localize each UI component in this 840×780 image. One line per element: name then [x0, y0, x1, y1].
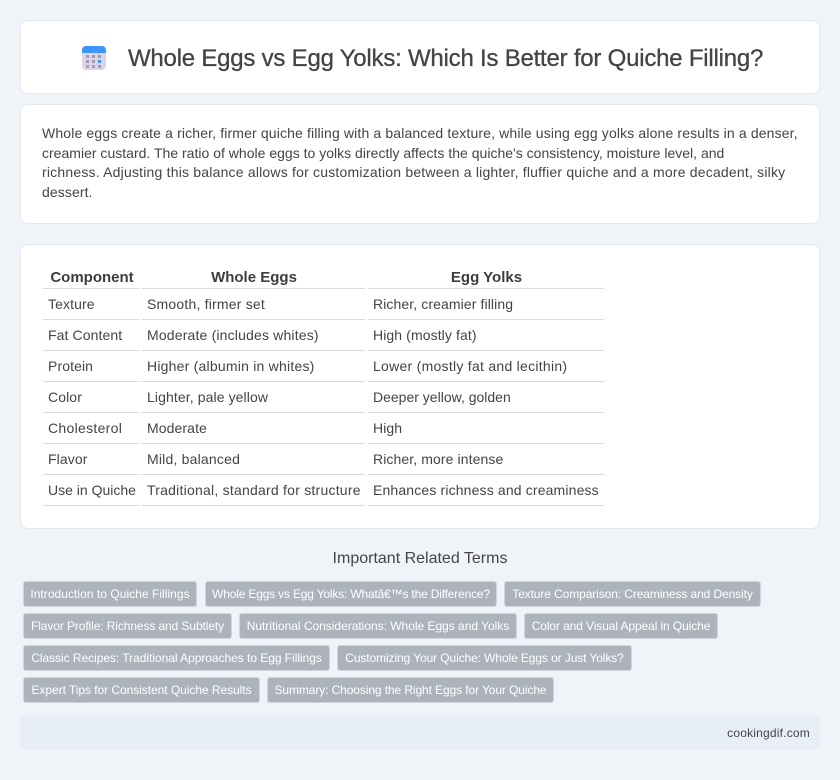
table rows: Texture [48, 296, 95, 312]
panel: introduction [20, 104, 820, 224]
table rows: Richer, creamier filling [373, 296, 513, 312]
panel: header [20, 20, 820, 94]
table rows: Richer, more intense [373, 451, 503, 467]
related term tags: Whole Eggs vs Egg Yolks: Whatâ€™s the Difference? [212, 587, 490, 601]
table rows: Smooth, firmer set [147, 296, 265, 312]
intro text [42, 125, 798, 200]
footer source: cookingdif.com [727, 726, 810, 740]
table header: Egg Yolks [451, 269, 522, 286]
intro text: richness. Adjusting this balance allows for customization between a lighter, fluffier quiche and a more decadent, silky [42, 164, 785, 180]
table rows: High [373, 420, 402, 436]
table rows: Color [48, 389, 82, 405]
table rows: Cholesterol [48, 420, 122, 436]
icon: calendar [82, 46, 106, 70]
table rows: High (mostly fat) [373, 327, 477, 343]
panel: comparison table [20, 244, 820, 529]
table rows [43, 288, 604, 506]
intro text: dessert. [42, 184, 93, 200]
table rows: Traditional, standard for structure [147, 482, 361, 498]
table rows: Deeper yellow, golden [373, 389, 511, 405]
related term tags: Nutritional Considerations: Whole Eggs and Yolks [247, 619, 509, 633]
table rows: Fat Content [48, 327, 122, 343]
table rows: Moderate (includes whites) [147, 327, 319, 343]
table rows: Lower (mostly fat and lecithin) [373, 358, 567, 374]
table rows: Flavor [48, 451, 88, 467]
related term tags: Color and Visual Appeal in Quiche [532, 619, 710, 633]
table header: Component [50, 269, 134, 286]
heading: related terms: Important Related Terms [333, 550, 507, 567]
intro text: Whole eggs create a richer, firmer quiche filling with a balanced texture, while using egg yolks alone results in a denser, [42, 125, 798, 141]
table rows: Mild, balanced [147, 451, 240, 467]
table rows: Protein [48, 358, 93, 374]
related term tags: Flavor Profile: Richness and Subtlety [31, 619, 224, 633]
related term tags: Expert Tips for Consistent Quiche Results [31, 683, 252, 697]
table rows: Moderate [147, 420, 207, 436]
table header: Whole Eggs [211, 269, 297, 286]
related term tags: Summary: Choosing the Right Eggs for Your Quiche [274, 683, 546, 697]
table rows: Higher (albumin in whites) [147, 358, 315, 374]
intro text: creamier custard. The ratio of whole eggs to yolks directly affects the quiche's consistency, moisture level, and [42, 145, 724, 161]
footer [20, 716, 820, 750]
related term tags [23, 581, 761, 703]
related term tags: Texture Comparison: Creaminess and Density [512, 587, 753, 601]
table rows: Enhances richness and creaminess [373, 482, 599, 498]
table header [50, 269, 522, 286]
title: Whole Eggs vs Egg Yolks: Which Is Better for Quiche Filling? [128, 45, 763, 72]
related term tags: Introduction to Quiche Fillings [30, 587, 190, 601]
table rows: Use in Quiche [48, 482, 136, 498]
related term tags: Classic Recipes: Traditional Approaches to Egg Fillings [31, 651, 322, 665]
table rows: Lighter, pale yellow [147, 389, 268, 405]
related term tags: Customizing Your Quiche: Whole Eggs or Just Yolks? [345, 651, 624, 665]
